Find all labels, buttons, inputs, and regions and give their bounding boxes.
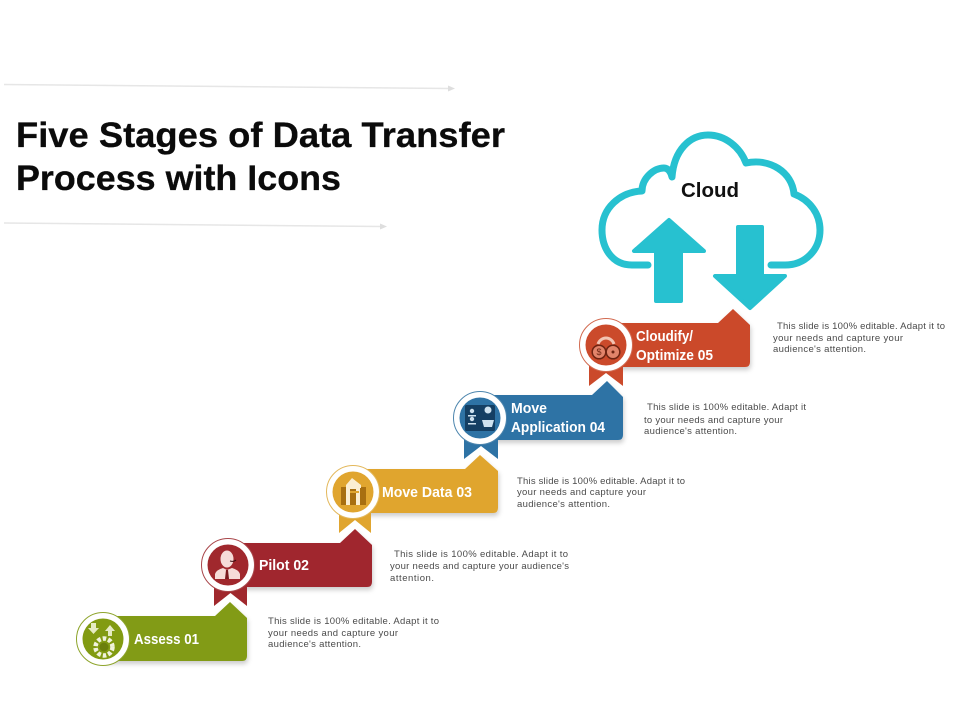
label: Application 04: [511, 420, 605, 436]
stage 5: Cloudify / Optimize: [580, 309, 945, 386]
stage 1: Assess: [76, 602, 439, 666]
description: your needs and capture your: [268, 628, 398, 639]
badge with gear icon: [76, 612, 130, 666]
title: Process with Icons: [16, 159, 341, 198]
description: audience's attention.: [773, 344, 866, 355]
banner: [228, 529, 372, 587]
badge with application icon: [454, 392, 506, 444]
description: audience's attention.: [268, 639, 361, 650]
label: Pilot 02: [259, 558, 309, 574]
description: to your needs and capture your: [644, 415, 783, 426]
label: [636, 329, 713, 364]
banner: [606, 309, 750, 367]
badge with person icon: [202, 538, 254, 592]
ribbon: [214, 575, 247, 606]
label: Optimize 05: [636, 348, 713, 364]
stage 2: Pilot: [202, 529, 569, 606]
description: your needs and capture your: [773, 333, 903, 344]
badge with optimize icon: $: [596, 347, 602, 357]
description: This slide is 100% editable. Adapt it to: [517, 476, 685, 487]
banner: [480, 381, 623, 440]
banner: [353, 455, 498, 513]
cloud outline: [602, 135, 820, 265]
bottom title arrow: [4, 223, 387, 230]
title: Five Stages of Data Transfer: [16, 116, 505, 155]
description: This slide is 100% editable. Adapt it to: [394, 549, 568, 560]
ribbon: [339, 502, 371, 533]
ribbon: [464, 428, 498, 459]
cloud label: Cloud: [681, 180, 739, 202]
icon: download arrow: [715, 227, 785, 308]
label: Move: [511, 401, 547, 417]
stage 4: Move Application: [454, 381, 806, 459]
ribbon: [589, 355, 623, 386]
description: [773, 321, 945, 355]
label: Assess 01: [134, 632, 199, 648]
label: [511, 401, 605, 436]
description: audience's attention.: [644, 426, 737, 437]
badge with optimize icon: [580, 318, 632, 372]
description: This slide is 100% editable. Adapt it to: [777, 321, 945, 332]
label: Move Data 03: [382, 485, 472, 501]
title: [16, 116, 505, 198]
banner: [103, 602, 247, 661]
description: [517, 476, 685, 510]
icon: upload arrow: [634, 220, 704, 301]
description: [390, 549, 569, 584]
description: This slide is 100% editable. Adapt it: [647, 402, 806, 413]
badge with house icon: [326, 466, 380, 518]
description: audience's attention.: [517, 499, 610, 510]
top title arrow: [4, 84, 455, 92]
description: your needs and capture your: [517, 487, 646, 498]
description: This slide is 100% editable. Adapt it to: [268, 616, 439, 627]
stage 3: Move Data: [326, 455, 685, 533]
description: attention.: [390, 573, 434, 584]
description: your needs and capture your audience's: [390, 561, 569, 572]
cloud with transfer arrows: [602, 135, 820, 308]
label: Cloudify/: [636, 329, 693, 345]
description: [644, 402, 806, 437]
description: [268, 616, 439, 650]
